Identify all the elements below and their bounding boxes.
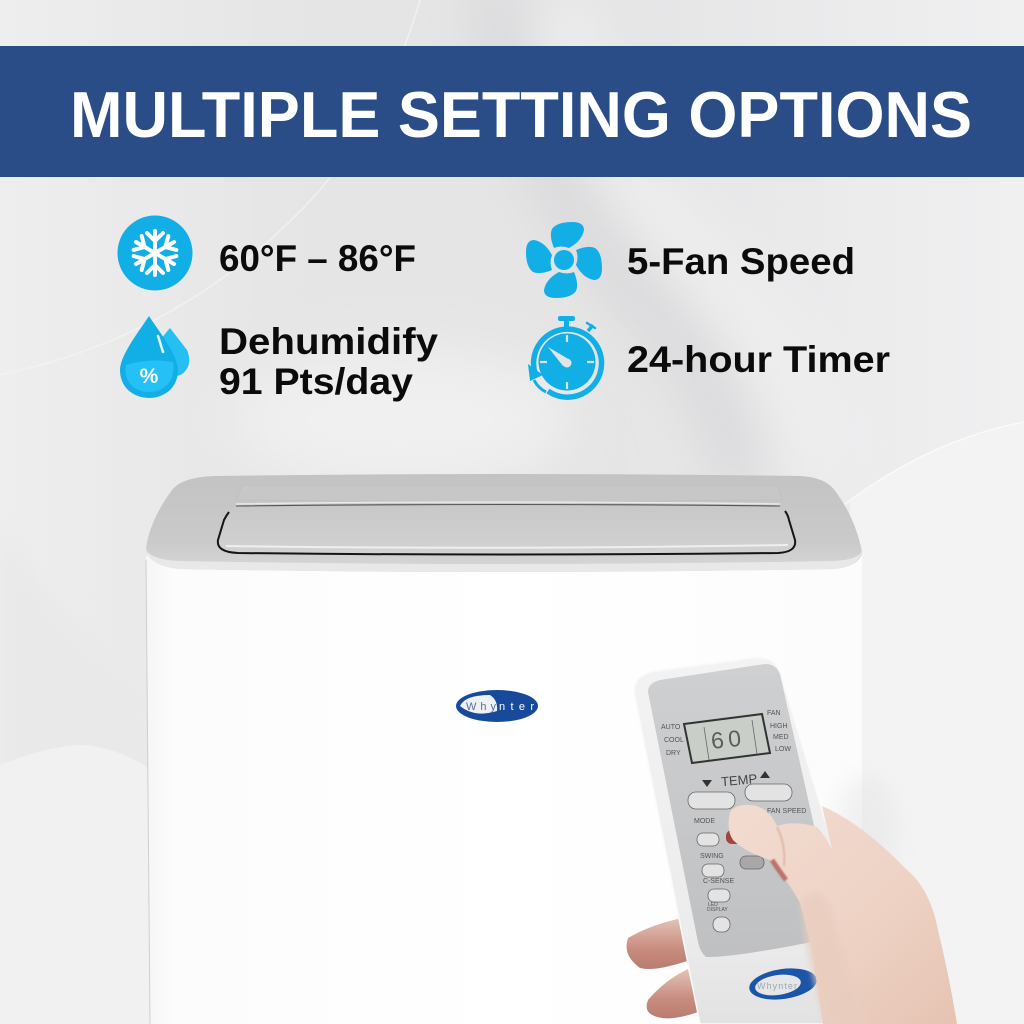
icon: water drop — [120, 316, 189, 398]
remote logo — [747, 964, 819, 1004]
remote labels — [661, 710, 806, 913]
remote labels: DISPLAY — [707, 907, 728, 913]
remote display — [684, 714, 770, 763]
red power button — [726, 830, 748, 844]
remote body — [634, 658, 872, 1024]
feature: temperature range — [118, 216, 416, 290]
label: dehumidify: Dehumidify — [219, 321, 438, 362]
label: pints per day: 91 Pts/day — [219, 361, 413, 402]
hand — [729, 805, 957, 1024]
whynter logo — [456, 690, 538, 722]
unit top panel — [146, 474, 862, 572]
remote labels: COOL — [664, 737, 684, 744]
remote temp label: TEMP — [720, 771, 758, 789]
remote labels: SWING — [700, 853, 724, 860]
soft shadow — [836, 775, 896, 885]
label: timer: 24-hour Timer — [627, 339, 890, 380]
remote control and hand — [626, 658, 957, 1024]
feature: fan speed — [526, 222, 855, 298]
feature: dehumidify — [120, 316, 438, 402]
title: MULTIPLE SETTING OPTIONS — [70, 78, 972, 151]
fingers behind remote — [626, 918, 698, 1018]
remote temp label — [702, 771, 770, 789]
remote buttons — [688, 784, 792, 932]
control strip — [236, 485, 782, 502]
whynter logo: nter — [499, 701, 534, 713]
icon: snowflake — [118, 216, 192, 290]
remote labels: LED — [708, 902, 718, 908]
label: fan speed: 5-Fan Speed — [627, 241, 855, 282]
remote labels: DRY — [666, 750, 681, 757]
label: temperature: 60°F – 86°F — [219, 238, 416, 279]
remote labels: FAN SPEED — [767, 808, 806, 815]
remote face panel — [648, 664, 815, 957]
icon: stopwatch — [528, 316, 602, 397]
top lid — [218, 502, 795, 554]
whynter logo: Why — [466, 701, 496, 713]
remote labels: LOW — [775, 746, 791, 753]
remote display: 60 — [710, 725, 742, 754]
remote labels: HIGH — [770, 723, 788, 730]
icon: fan — [526, 222, 602, 298]
feature: timer — [528, 316, 890, 397]
icon: water drop: % — [140, 365, 159, 388]
remote labels: MED — [773, 734, 789, 741]
remote logo: Whynter — [757, 981, 797, 991]
remote labels: MODE — [694, 818, 715, 825]
unit body — [146, 556, 862, 1024]
header banner — [0, 46, 1024, 177]
remote labels: C-SENSE — [703, 878, 734, 885]
remote labels: FAN — [767, 710, 781, 717]
remote labels: AUTO — [661, 724, 681, 731]
air conditioner unit — [146, 474, 862, 1024]
